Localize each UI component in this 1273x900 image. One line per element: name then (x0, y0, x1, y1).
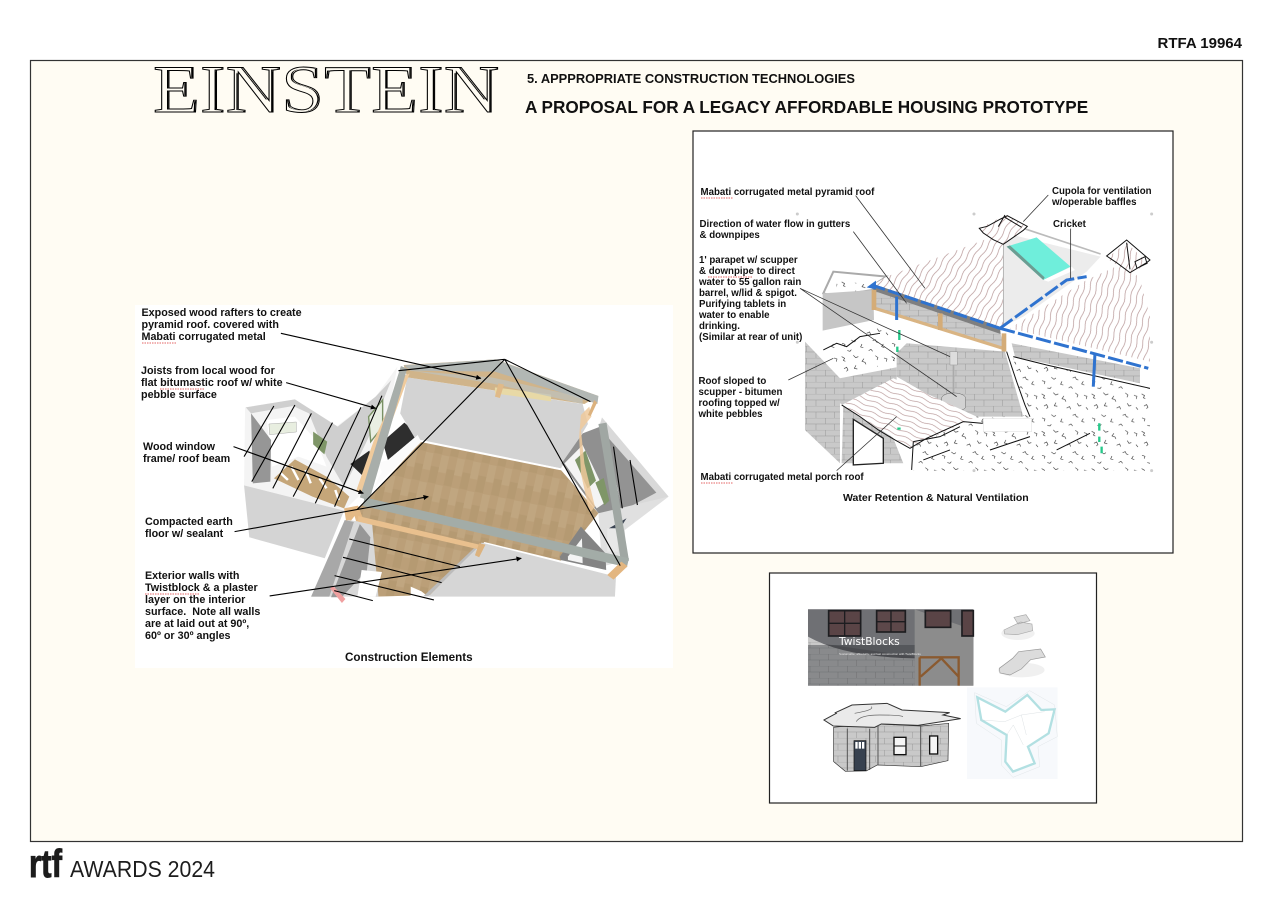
isometric sketch (788, 195, 1152, 471)
entry corridor (312, 520, 378, 597)
panel: water retention and natural ventilation (693, 131, 1173, 553)
label: rafters: Exposed wood rafters to create (142, 307, 302, 319)
photo caption: TwistBlocks: TwistBlocks (838, 635, 900, 648)
label: parapet: drinking. (699, 321, 740, 332)
label: joists (141, 365, 283, 401)
porch roof (842, 378, 977, 448)
label: window frame (143, 441, 230, 465)
leader lines (788, 195, 1071, 471)
project code: RTFA 19964 (1158, 35, 1243, 52)
label: exterior walls: Twistblock & a plaster (145, 582, 259, 594)
pyramid roof left face (873, 233, 1003, 328)
label: porch roof: Mabati corrugated metal porch roof (700, 472, 864, 483)
label: earth floor: Compacted earth (145, 516, 233, 528)
label: exterior walls: are at laid out at 90º, (145, 618, 249, 630)
water flow in gutters (867, 277, 1148, 387)
photo subcaption: Sustainable, affordable and fast construction with TwistBlocks (839, 652, 921, 656)
back wall (400, 377, 588, 468)
guide dots (797, 214, 1152, 471)
beams (360, 366, 407, 501)
rear roof (1010, 262, 1150, 362)
caption: water retention: Water Retention & Natural Ventilation (843, 492, 1029, 504)
label: parapet (698, 255, 802, 343)
label: joists: flat bitumastic roof w/ white (141, 377, 283, 389)
rear left pebble roof (823, 272, 887, 296)
floor (355, 441, 598, 597)
pyramid roof right face (1003, 233, 1101, 327)
rafters and leader lines (234, 333, 637, 601)
white label block (983, 418, 1032, 432)
label: parapet: barrel, w/lid & spigot. (699, 288, 797, 299)
label: water flow: & downpipes (700, 230, 760, 241)
label: window frame: Wood window (143, 441, 216, 453)
cupolas (980, 215, 1027, 245)
brick gable wall (875, 290, 1005, 350)
label: rafters (142, 307, 302, 343)
label: earth floor: floor w/ sealant (145, 528, 224, 540)
label: exterior walls: layer on the interior (145, 594, 246, 606)
title: EINSTEIN: EINSTEIN (153, 51, 499, 127)
brick walls (805, 342, 840, 463)
label: window frame: frame/ roof beam (143, 453, 230, 465)
ground pebbles (913, 357, 1150, 471)
label: exterior walls: surface. Note all walls (145, 606, 260, 618)
photo: twistblock wall (808, 609, 1058, 779)
label: sloped roof (698, 376, 783, 420)
label: exterior walls: Exterior walls with (145, 570, 239, 582)
label: parapet: & downpipe to direct (699, 266, 796, 277)
label: joists: pebble surface (141, 389, 217, 401)
rain barrel (942, 352, 966, 411)
porch opening (853, 419, 883, 465)
lower right wall (428, 543, 616, 597)
panel: twistblocks (770, 573, 1096, 803)
label: exterior walls: 60º or 30º angles (145, 630, 231, 642)
label: parapet: 1' parapet w/ scupper (699, 255, 798, 266)
label: cupola (1051, 186, 1152, 208)
floor plan (967, 687, 1058, 779)
label: cricket: Cricket (1053, 219, 1087, 230)
label: sloped roof: Roof sloped to (698, 376, 766, 387)
label: cupola: w/operable baffles (1051, 197, 1137, 208)
heading: section number and name: 5. APPPROPRIATE CONSTRUCTION TECHNOLOGIES (527, 71, 855, 86)
label: rafters: Mabati corrugated metal (142, 331, 266, 343)
cricket (1007, 237, 1071, 280)
rendered blocks (998, 615, 1045, 677)
left wing (244, 367, 397, 511)
label: water flow (700, 219, 850, 241)
green marks (897, 330, 1102, 453)
house rendering (824, 703, 961, 771)
label: parapet: water to 55 gallon rain (698, 277, 801, 288)
logo mark: rtf (29, 843, 63, 886)
label: earth floor (145, 516, 233, 540)
panel: construction elements (135, 305, 673, 668)
right side room (600, 417, 669, 513)
label: sloped roof: white pebbles (698, 409, 763, 420)
white pebble roof (805, 320, 907, 378)
label: sloped roof: scupper - bitumen (698, 387, 783, 398)
label: exterior walls (145, 570, 260, 642)
label: joists: Joists from local wood for (141, 365, 276, 377)
axonometric interior drawing (244, 359, 669, 603)
label: parapet: Purifying tablets in (699, 299, 786, 310)
label: cupola: Cupola for ventilation (1052, 186, 1152, 197)
label: parapet: water to enable (698, 310, 770, 321)
caption: construction elements: Construction Elements (345, 651, 473, 664)
label: pyramid roof: Mabati corrugated metal pyramid roof (700, 187, 875, 198)
label: parapet: (Similar at rear of unit) (699, 332, 802, 343)
label: water flow: Direction of water flow in gutters (700, 219, 850, 230)
label: sloped roof: roofing topped w/ (698, 398, 780, 409)
logo text: AWARDS 2024 (70, 856, 215, 882)
logo: rtf awards 2024 (29, 843, 215, 886)
label: rafters: pyramid roof. covered with (142, 319, 279, 331)
heading: proposal title: A PROPOSAL FOR A LEGACY AFFORDABLE HOUSING PROTOTYPE (525, 97, 1088, 117)
